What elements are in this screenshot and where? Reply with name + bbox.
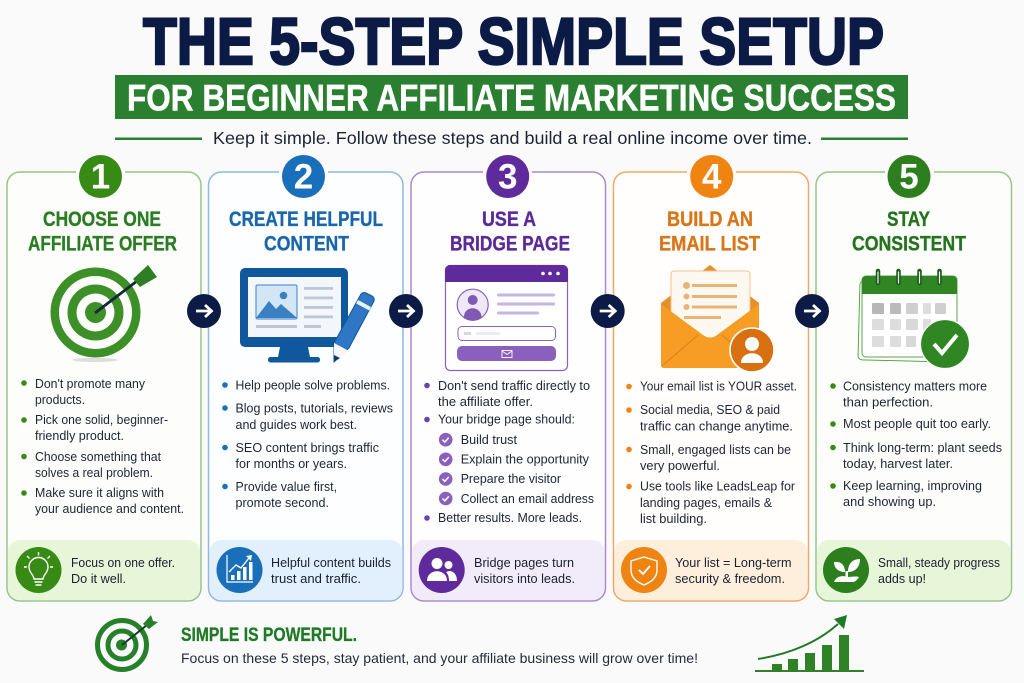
bullet list 4 bbox=[626, 378, 797, 526]
bullet list 2: Help people solve problems. bbox=[236, 378, 390, 392]
heading 4 bbox=[659, 208, 760, 256]
heading 3: BRIDGE PAGE bbox=[450, 232, 570, 256]
footer strip 3 bbox=[412, 540, 604, 600]
panel: step 2 bbox=[208, 155, 403, 601]
closing message bbox=[181, 625, 698, 666]
number badge 4: 4 bbox=[702, 158, 722, 196]
bullet list 2: promote second. bbox=[236, 495, 329, 510]
bullet list 1: friendly product. bbox=[35, 428, 124, 443]
bullet list 2 bbox=[222, 378, 393, 510]
footer strip 4 bbox=[614, 540, 808, 600]
check items: Build trust bbox=[461, 432, 517, 447]
number badge 1: 1 bbox=[91, 158, 110, 196]
heading 5 bbox=[852, 208, 966, 256]
heading 5: STAY bbox=[887, 208, 930, 231]
subtitle banner: FOR BEGINNER AFFILIATE MARKETING SUCCESS bbox=[127, 78, 896, 118]
panel: step 5 bbox=[816, 155, 1012, 601]
closing message: SIMPLE IS POWERFUL. bbox=[181, 625, 357, 646]
bullet list 2: Provide value first, bbox=[236, 479, 337, 494]
bullet list 4: landing pages, emails & bbox=[640, 495, 772, 510]
bullet list 5: Consistency matters more bbox=[843, 378, 987, 394]
footer strip 4: security & freedom. bbox=[675, 571, 785, 586]
icon: bridge page window bbox=[445, 265, 568, 370]
bullet list 1: solves a real problem. bbox=[35, 465, 153, 480]
heading 2: CREATE HELPFUL bbox=[229, 208, 383, 231]
bullet list 4: Your email list is YOUR asset. bbox=[640, 378, 797, 394]
heading 1: AFFILIATE OFFER bbox=[28, 232, 177, 256]
footer strip 3: Bridge pages turn bbox=[474, 555, 574, 570]
footer strip 2: Helpful content builds bbox=[271, 555, 391, 570]
bullet list 4: Social media, SEO & paid bbox=[640, 402, 780, 417]
footer strip 2: trust and traffic. bbox=[271, 571, 361, 586]
check items: Prepare the visitor bbox=[461, 471, 562, 486]
closing message: Focus on these 5 steps, stay patient, and your affiliate business will grow over time! bbox=[181, 650, 698, 666]
icon: target with dart bbox=[50, 265, 157, 362]
bullet list 1: Choose something that bbox=[35, 449, 161, 464]
number badge 3: 3 bbox=[498, 158, 517, 196]
bullet list 1: your audience and content. bbox=[35, 501, 184, 516]
footer strip 3: visitors into leads. bbox=[474, 571, 575, 586]
bullet list 4: Use tools like LeadsLeap for bbox=[640, 478, 796, 494]
footer strip 5: adds up! bbox=[878, 571, 926, 586]
bullet list 5: Keep learning, improving bbox=[843, 478, 982, 493]
icon: calendar with check bbox=[858, 271, 970, 368]
tagline: Keep it simple. Follow these steps and build a real online income over time. bbox=[213, 128, 812, 148]
number badge 3 bbox=[483, 155, 532, 198]
arrow 4 to 5 bbox=[795, 294, 829, 328]
heading 4: BUILD AN bbox=[667, 208, 753, 231]
check items: Collect an email address bbox=[461, 491, 594, 506]
footer strip 4: Your list = Long-term bbox=[675, 555, 792, 570]
heading 2 bbox=[229, 208, 383, 256]
bullet list 1: Pick one solid, beginner- bbox=[35, 412, 168, 427]
footer strip 1 bbox=[8, 540, 200, 600]
check items bbox=[439, 432, 594, 506]
bullet list 2: and guides work best. bbox=[236, 417, 357, 432]
panel: step 1 bbox=[7, 155, 201, 601]
bullet list 3: Don't send traffic directly to bbox=[438, 378, 590, 393]
bullet list 3: the affiliate offer. bbox=[438, 394, 533, 409]
bullet list 3: Your bridge page should: bbox=[438, 412, 575, 426]
footer strip 1: Focus on one offer. bbox=[71, 555, 175, 570]
footer strip 2 bbox=[210, 540, 402, 600]
bullet list 3: Better results. More leads. bbox=[438, 510, 582, 525]
check items: Explain the opportunity bbox=[461, 452, 589, 466]
heading 1: CHOOSE ONE bbox=[43, 208, 161, 231]
arrow 2 to 3 bbox=[389, 294, 423, 328]
footer strip 5 bbox=[817, 540, 1010, 600]
bullet list 4: Small, engaged lists can be bbox=[640, 442, 791, 457]
arrow 3 to 4 bbox=[591, 294, 625, 328]
heading 1 bbox=[28, 208, 177, 256]
bullet list 5: Think long-term: plant seeds bbox=[843, 440, 1002, 455]
number badge 5: 5 bbox=[899, 158, 919, 196]
bullet list 5: today, harvest later. bbox=[843, 456, 953, 471]
title: THE 5-STEP SIMPLE SETUP bbox=[143, 4, 884, 78]
number badge 4 bbox=[687, 155, 736, 198]
heading 2: CONTENT bbox=[264, 232, 349, 256]
bullet list 5 bbox=[830, 378, 1002, 509]
bullet list 2: SEO content brings traffic bbox=[236, 440, 379, 455]
number badge 2 bbox=[279, 155, 328, 198]
heading 3 bbox=[450, 208, 570, 256]
bullet list 5: and showing up. bbox=[843, 494, 936, 509]
bullet list 1 bbox=[21, 376, 184, 516]
heading 3: USE A bbox=[482, 208, 536, 231]
number badge 2: 2 bbox=[294, 158, 313, 196]
bullet list 1: Make sure it aligns with bbox=[35, 485, 164, 500]
bullet list 4: very powerful. bbox=[640, 458, 720, 473]
number badge 5 bbox=[885, 155, 934, 198]
bullet list 4: traffic can change anytime. bbox=[640, 418, 793, 434]
icon: bottom target bbox=[98, 615, 158, 670]
chart: growth bars with arrow bbox=[755, 615, 864, 672]
footer strip 5: Small, steady progress bbox=[878, 555, 1000, 570]
bullet list 2: Blog posts, tutorials, reviews bbox=[236, 400, 393, 416]
bullet list 1: products. bbox=[35, 392, 85, 407]
panel: step 3 bbox=[411, 155, 606, 601]
icon: envelope with list and person bbox=[661, 265, 774, 372]
arrow 1 to 2 bbox=[187, 294, 221, 328]
footer strip 1: Do it well. bbox=[71, 571, 126, 586]
heading 4: EMAIL LIST bbox=[659, 232, 760, 256]
icon: monitor with pencil bbox=[240, 268, 374, 362]
bullet list 2: for months or years. bbox=[236, 456, 347, 471]
panel: step 4 bbox=[614, 155, 808, 601]
number badge 1 bbox=[76, 155, 125, 198]
heading 5: CONSISTENT bbox=[852, 232, 966, 256]
bullet list 1: Don't promote many bbox=[35, 376, 145, 391]
bullet list 5: Most people quit too early. bbox=[843, 416, 991, 431]
bullet list 4: list building. bbox=[640, 511, 707, 526]
bullet list 5: than perfection. bbox=[843, 394, 933, 410]
bullet list 3 bbox=[424, 378, 594, 525]
